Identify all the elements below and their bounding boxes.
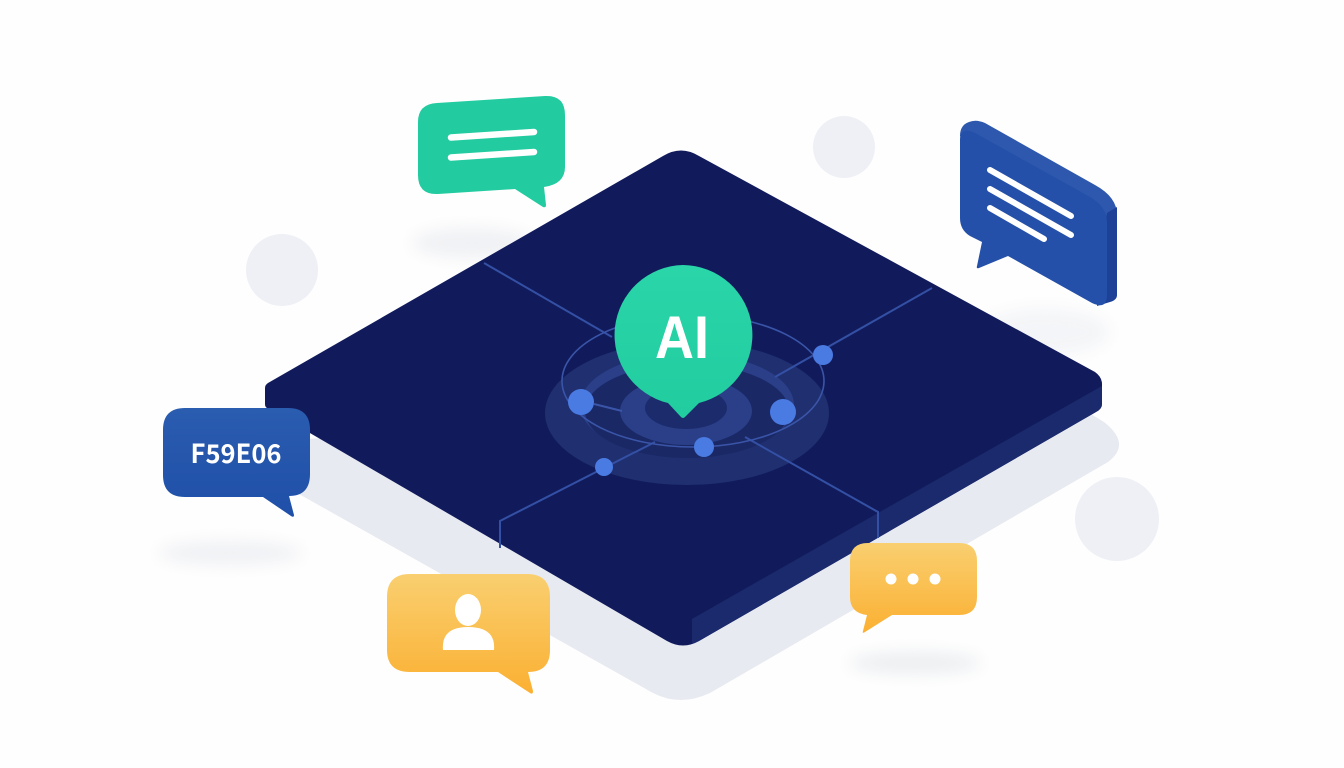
yellow user bubble: [387, 574, 550, 694]
soft shadow: green bubble: [412, 228, 532, 258]
orbit ring: [562, 315, 824, 447]
platform right edge face: [692, 386, 1102, 644]
connector line: [594, 404, 622, 411]
soft shadow: blue 3D bubble: [980, 308, 1110, 356]
user icon: [443, 594, 494, 650]
AI pin bubble: [615, 265, 752, 418]
decorative circle: right: [1075, 477, 1159, 561]
radar rings: [545, 341, 829, 485]
platform: [265, 150, 1102, 646]
platform cast shadow: [290, 395, 1119, 700]
message lines: [451, 132, 534, 158]
network node 1: [568, 389, 594, 415]
code label: F59E06: [190, 434, 282, 471]
network node 4: [694, 437, 714, 457]
bubble depth side: [1097, 207, 1117, 306]
decorative circle: top: [813, 116, 875, 178]
blue 3D chat bubble: [960, 121, 1117, 306]
typing dots: [886, 574, 940, 584]
decorative circle: left: [246, 234, 318, 306]
bubble face: [960, 131, 1107, 305]
green chat bubble: [418, 96, 565, 207]
platform seam lines: [484, 263, 932, 548]
platform slab: [265, 150, 1102, 646]
AI label: AI: [655, 304, 709, 371]
network node 3: [813, 345, 833, 365]
soft shadow: small yellow bubble: [849, 652, 981, 674]
message lines: [990, 170, 1071, 239]
blue code bubble: [163, 408, 310, 517]
bubble top lip: [960, 121, 1117, 240]
network node 5: [595, 458, 613, 476]
yellow typing bubble: [850, 543, 977, 633]
soft shadow: blue code bubble: [158, 541, 302, 565]
network node 2: [770, 399, 796, 425]
